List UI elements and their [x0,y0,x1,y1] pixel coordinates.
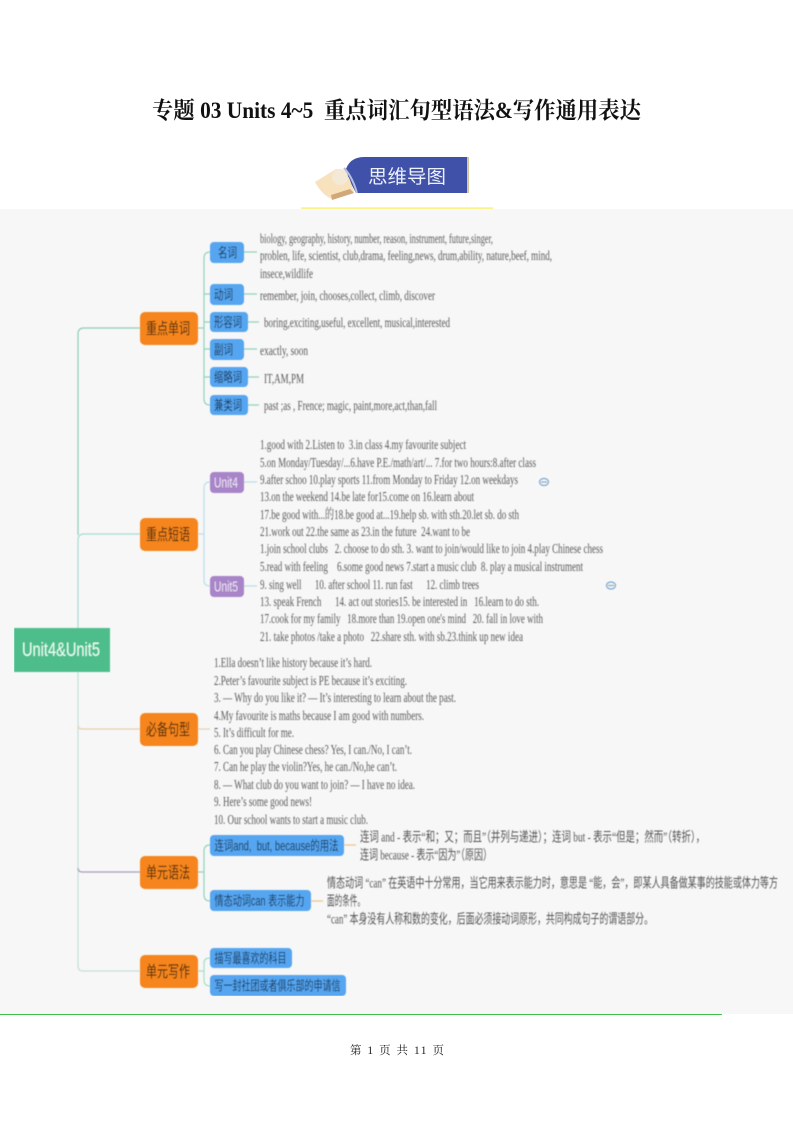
tag: 动词 [210,284,244,305]
connector: trunk to 重点单词 [78,328,140,535]
badge underline [301,208,493,209]
noun word list: insece,wildlife [260,267,313,282]
connectors [198,482,257,586]
badge label: 思维导图 [368,166,446,188]
Unit5 phrases [260,542,603,645]
tag: conjunctions: 连词and, but, because的用法 [214,838,338,854]
sentence list: 4.My favourite is maths because I am good with numbers. [214,709,424,724]
conjunction explanation: 连词 because - 表示“因为”（原因） [360,848,492,862]
Unit4 phrases: 1.good with 2.Listen to 3.in class 4.my favourite subject [260,438,466,453]
heading node: 单元写作 [146,963,190,981]
branch: 必备句型 [140,656,456,828]
Unit4 phrases: 13.on the weekend 14.be late for15.come on 16.learn about [260,490,474,505]
tag: Unit5 [210,576,244,597]
heading node [140,856,198,889]
sentence list: 2.Peter’s favourite subject is PE because it’s exciting. [214,674,407,689]
badge ribbon [345,157,469,193]
Unit5 phrases: 1.join school clubs 2. choose to do sth. 3. want to join/would like to join 4.play Chinese chess [260,542,603,557]
mind map badge [315,157,469,200]
Unit4 phrases: 9.after schoo 10.play sports 11.from Monday to Friday 12.on weekdays [260,473,518,488]
branch: 单元语法 [140,828,778,926]
sentence list: 10. Our school wants to start a music club. [214,813,368,828]
sentence list: 3. — Why do you like it? — It’s interesting to learn about the past. [214,691,456,706]
tag: Unit5: Unit5 [214,580,238,596]
icon: link Unit4 [540,478,548,486]
tag: 形容词 [210,312,248,332]
noun word list: biology, geography, history, number, reason, instrument, future,singer, [260,232,493,247]
tag: describe favourite subject [210,948,292,968]
tag: 缩略词 [210,367,248,387]
Unit5 phrases: 21. take photos /take a photo 22.share sth. with sb.23.think up new idea [260,630,524,645]
tag: club application: 写一封社团或者俱乐部的申请信 [214,978,340,994]
connectors [198,845,210,901]
tag: 名词 [210,242,244,263]
tag: modal can: 情态动词can 表示能力 [214,894,304,908]
tag: Unit4 [210,472,244,493]
multi-class word list: past ;as , Frence; magic, paint,more,act,than,fall [264,399,437,414]
verb word list: remember, join, chooses,collect, climb, discover [260,289,435,304]
sentence list: 1.Ella doesn’t like history because it’s hard. [214,656,372,671]
connectors [198,252,259,405]
tag: 副词: 副词 [214,342,233,358]
modal can explanation: 面的条件。 [327,892,365,908]
mind map [14,232,778,996]
conjunction explanation [360,828,705,862]
connector: trunk to 单元语法 [78,868,140,872]
icon: link Unit5 [606,582,616,589]
footer rule [0,1014,722,1015]
sentence list: 7. Can he play the violin?Yes, he can./No,he can’t. [214,760,397,775]
connectors [198,958,210,986]
abbreviation word list: IT,AM,PM [264,372,304,387]
tag: 兼类词: 兼类词 [214,398,242,413]
heading node [140,713,198,746]
sentence list: 9. Here’s some good news! [214,795,312,810]
tag: 形容词: 形容词 [214,314,242,330]
tag: 动词: 动词 [214,288,233,302]
sentence list: 6. Can you play Chinese chess? Yes, I can./No, I can’t. [214,743,412,758]
tag: Unit4: Unit4 [214,476,238,492]
heading node [140,518,198,551]
tag: 兼类词 [210,395,248,415]
Unit5 phrases: 9. sing well 10. after school 11. run fast 12. climb trees [260,578,479,593]
connector [198,728,210,730]
tag: conjunctions [210,835,344,856]
modal can explanation [327,874,778,926]
heading node: 必备句型 [146,721,190,739]
tag: 缩略词: 缩略词 [214,370,242,385]
heading node [140,312,198,345]
Unit4 phrases: 5.on Monday/Tuesday/...6.have P.E./math/art/... 7.for two hours:8.after class [260,456,536,471]
adverb word list: exactly, soon [260,344,308,359]
connector: trunk to 单元写作 [78,672,140,971]
root node [14,628,110,672]
icon: open book [315,168,357,200]
branch: 重点短语 [140,438,616,645]
connector: trunk to 必备句型 [78,725,140,729]
branch: 单元写作 [140,948,346,996]
sentence list: 8. — What club do you want to join? — I have no idea. [214,778,415,793]
Unit5 phrases: 13. speak French 14. act out stories15. be interested in 16.learn to do sth. [260,595,539,610]
Unit4 phrases: 21.work out 22.the same as 23.in the future 24.want to be [260,525,470,540]
heading node: 单元语法 [146,864,190,882]
Unit5 phrases: 17.cook for my family 18.more than 19.open one's mind 20. fall in love with [260,612,543,627]
Unit5 phrases: 5.read with feeling 6.some good news 7.start a music club 8. play a musical instrument [260,560,583,575]
noun word list: problen, life, scientist, club,drama, feeling,news, drum,ability, nature,beef, mind, [260,249,552,264]
page number: 第 1 页 共 11 页 [350,1043,444,1057]
sentence list [214,656,456,828]
sentence list: 5. It’s difficult for me. [214,726,294,741]
heading node: 重点单词 [146,320,190,338]
connector: trunk to 重点短语 [78,534,140,628]
heading node: 重点短语 [146,526,190,544]
noun word list [260,232,552,282]
tag: describe favourite subject: 描写最喜欢的科目 [214,951,286,966]
title: 专题 03 Units 4~5 重点词汇句型语法&写作通用表达 [152,97,643,123]
Unit4 phrases [260,438,536,540]
tag: 副词 [210,339,244,360]
Unit4 phrases: 17.be good with...的18.be good at...19.help sb. with sth.20.let sb. do sth [260,507,519,523]
adjective word list: boring,exciting,useful, excellent, musical,interested [264,316,450,331]
tag: 名词: 名词 [218,246,237,260]
tag: modal can [210,890,311,911]
branch: 重点单词 [140,232,552,415]
mind map panel background [0,209,793,1014]
tag: club application [210,975,346,996]
heading node [140,955,198,988]
root node: Unit4&Unit5 [22,640,100,661]
